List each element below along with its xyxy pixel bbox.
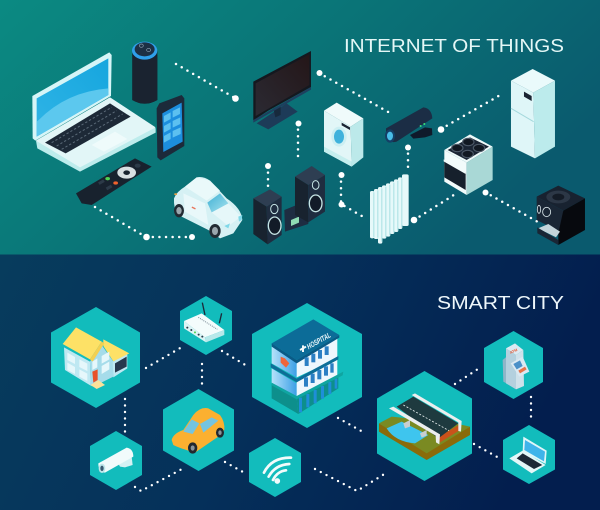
icon: small laptop xyxy=(509,437,547,473)
icon: wifi xyxy=(264,458,291,483)
hexagon: house xyxy=(51,307,140,408)
dotted connectors: internet of things xyxy=(95,64,538,237)
hexagon: laptop xyxy=(503,425,555,484)
icon: refrigerator xyxy=(511,69,555,158)
icon: smartphone xyxy=(157,95,184,160)
icon: bridge xyxy=(379,393,470,460)
panel: smart city background xyxy=(0,254,600,510)
icon: stereo system xyxy=(253,166,325,244)
hexagon: hospital xyxy=(252,303,362,428)
hexagon: bridge xyxy=(377,371,472,481)
icon: radiator xyxy=(370,174,409,244)
connector nodes: internet of things xyxy=(143,70,488,240)
icon: stove xyxy=(444,134,493,195)
icon: atm: ATM xyxy=(509,348,518,355)
icon: connected car xyxy=(174,177,242,238)
icon: security camera xyxy=(385,107,432,143)
icon: laptop xyxy=(32,52,156,172)
icon: washing machine xyxy=(324,103,363,167)
hexagon: atm xyxy=(484,331,543,399)
heading: smart city: SMART CITY xyxy=(437,293,564,313)
hexagon: wifi xyxy=(249,438,301,497)
icon: router xyxy=(184,303,224,342)
icon: white camera xyxy=(98,448,133,473)
icon: hospital: HOSPITAL xyxy=(305,330,333,351)
heading: internet of things: INTERNET OF THINGS xyxy=(344,36,564,56)
hexagon: camera xyxy=(90,431,142,490)
dotted connectors: smart city xyxy=(125,347,531,491)
icon: remote control xyxy=(76,158,152,205)
hexagon: yellow car xyxy=(163,389,234,471)
hexagon: router xyxy=(180,296,232,355)
icon: television xyxy=(253,51,311,129)
icon: coffee machine xyxy=(537,186,585,245)
icon: house xyxy=(63,327,129,389)
icon: yellow car xyxy=(172,408,224,454)
icon: smart speaker xyxy=(132,42,157,104)
panel: internet of things background xyxy=(0,0,600,254)
